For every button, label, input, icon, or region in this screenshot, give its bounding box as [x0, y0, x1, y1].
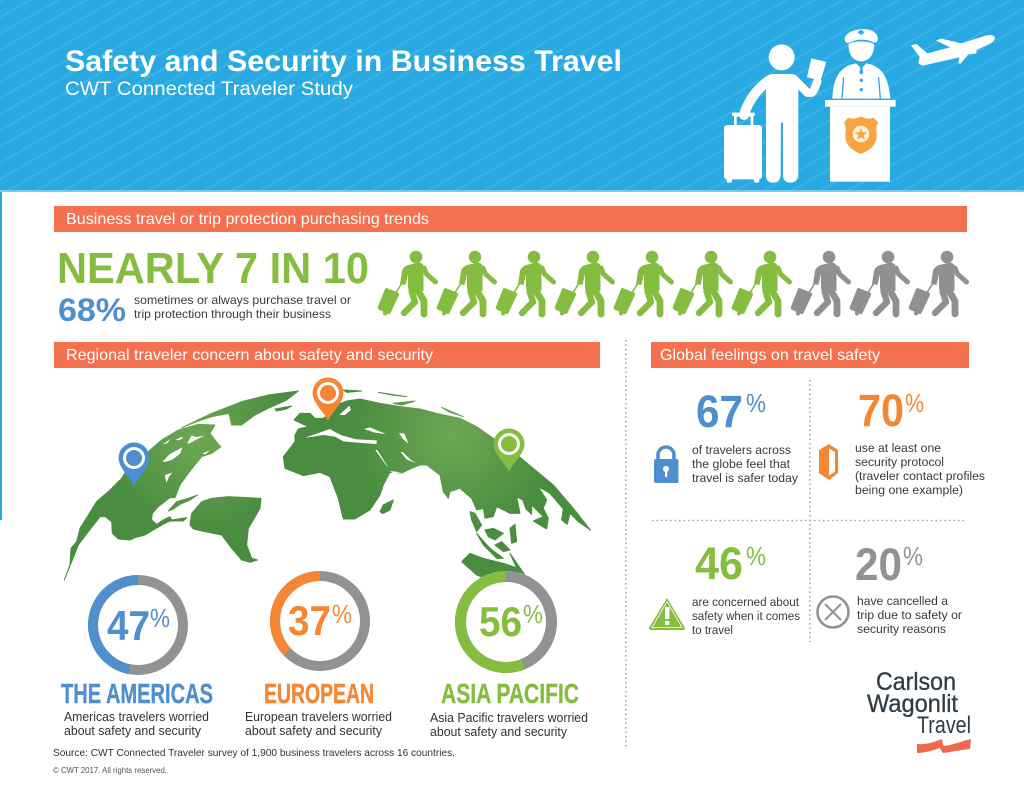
stat: 70 percent protocol: being one example) — [855, 483, 963, 497]
world map — [64, 390, 591, 582]
headline: nearly 7 in 10: NEARLY 7 IN 10 — [57, 244, 369, 293]
stat: 20 percent cancelled: trip due to safety or — [857, 608, 962, 622]
region label: European: EUROPEAN — [264, 678, 374, 709]
stat: 67 percent safer — [692, 386, 799, 485]
copyright: © CWT 2017. All rights reserved. — [53, 765, 167, 775]
stat: 70 percent protocol: use at least one — [855, 441, 941, 455]
stat: 46 percent concerned: are concerned about — [692, 595, 800, 609]
donut: Asia Pacific 56% — [455, 571, 557, 673]
logo: Carlson Wagonlit Travel — [867, 668, 971, 753]
stat: 20 percent cancelled: have cancelled a — [857, 594, 948, 608]
icon: padlock — [654, 447, 678, 483]
stat: 46 percent concerned: % — [746, 541, 766, 571]
stat: 68 percent: 68% — [58, 292, 126, 328]
stat: 20 percent cancelled: % — [903, 541, 923, 571]
stat: 20 percent cancelled: 20 — [855, 539, 902, 590]
stat: 20 percent cancelled: security reasons — [857, 622, 946, 636]
logo: Carlson Wagonlit Travel: Travel — [917, 712, 971, 739]
stat: 70 percent protocol: 70 — [858, 385, 904, 436]
banner: global feelings — [651, 342, 969, 368]
title: Safety and Security in Business Travel — [65, 45, 622, 78]
stat: 67 percent safer: travel is safer today — [692, 471, 799, 485]
text: purchase description: trip protection through their business — [134, 307, 331, 321]
stat: 46 percent concerned: 46 — [695, 538, 743, 589]
stat: 67 percent safer: the globe feel that — [692, 457, 791, 471]
text: purchase description — [134, 293, 351, 321]
map: Europe, Africa, Asia, Australia — [283, 390, 591, 582]
icon: traveler with suitcase — [724, 44, 826, 183]
region label: European — [245, 678, 392, 738]
region label: European: about safety and security — [245, 724, 383, 738]
donut: Asia Pacific 56%: % — [523, 599, 543, 629]
icon: shield — [819, 444, 838, 480]
stat: 70 percent protocol: (traveler contact profiles — [855, 469, 985, 483]
banner: global feelings: Global feelings on travel safety — [660, 347, 880, 364]
banner: purchasing trends: Business travel or trip protection purchasing trends — [66, 211, 429, 228]
region label: Asia Pacific — [430, 678, 588, 739]
donut: European 37%: 37 — [288, 597, 331, 644]
stat: 67 percent safer: of travelers across — [692, 443, 791, 457]
stat: 46 percent concerned: safety when it comes — [692, 609, 800, 623]
header band — [0, 0, 1024, 520]
text: purchase description: sometimes or always purchase travel or — [134, 293, 351, 307]
logo: Carlson Wagonlit Travel: Carlson — [876, 668, 956, 696]
donut: European 37%: % — [332, 599, 352, 629]
donut: Americas 47%: % — [150, 603, 170, 633]
donut: European 37% — [270, 571, 370, 671]
icon: cancel circle — [818, 596, 848, 628]
logo: Carlson Wagonlit Travel: Wagonlit — [867, 690, 958, 718]
region label: Americas: Americas travelers worried — [64, 710, 209, 724]
region label: Americas: about safety and security — [64, 724, 202, 738]
banner: regional concern: Regional traveler concern about safety and security — [66, 347, 433, 364]
icon: warning triangle — [649, 598, 685, 630]
region label: Americas: THE AMERICAS — [61, 678, 213, 709]
map: Americas and Greenland — [64, 391, 298, 580]
icon: airplane — [911, 35, 995, 66]
region label: Americas — [61, 678, 213, 738]
region label: Asia Pacific: Asia Pacific travelers worried — [430, 711, 588, 725]
banner: purchasing trends — [54, 206, 967, 232]
region label: Asia Pacific: ASIA PACIFIC — [441, 678, 579, 709]
pictogram: 7 of 10 travelers — [378, 251, 966, 316]
banner: regional concern — [54, 342, 600, 368]
donut: Asia Pacific 56%: 56 — [479, 598, 522, 645]
stat: 70 percent protocol — [855, 385, 985, 497]
stat: 46 percent concerned: to travel — [692, 623, 733, 637]
pin: Asia Pacific — [494, 428, 524, 472]
stat: 46 percent concerned — [692, 538, 800, 637]
stat: 20 percent cancelled — [855, 539, 962, 636]
source note: Source: CWT Connected Traveler survey of 1,900 business travelers across 16 countries. — [53, 747, 455, 759]
subtitle: CWT Connected Traveler Study — [65, 78, 353, 100]
pin: Americas — [118, 442, 150, 487]
stat: 70 percent protocol: security protocol — [855, 455, 944, 469]
region label: European: European travelers worried — [245, 710, 392, 724]
region label: Asia Pacific: about safety and security — [430, 725, 568, 739]
donut: Americas 47% — [88, 575, 188, 675]
icon: security officer at podium — [825, 29, 896, 182]
stat: 70 percent protocol: % — [905, 388, 924, 418]
donut: Americas 47%: 47 — [107, 602, 150, 649]
pin: Europe — [312, 378, 344, 421]
stat: 67 percent safer: 67 — [696, 386, 743, 437]
stat: 67 percent safer: % — [746, 388, 766, 418]
